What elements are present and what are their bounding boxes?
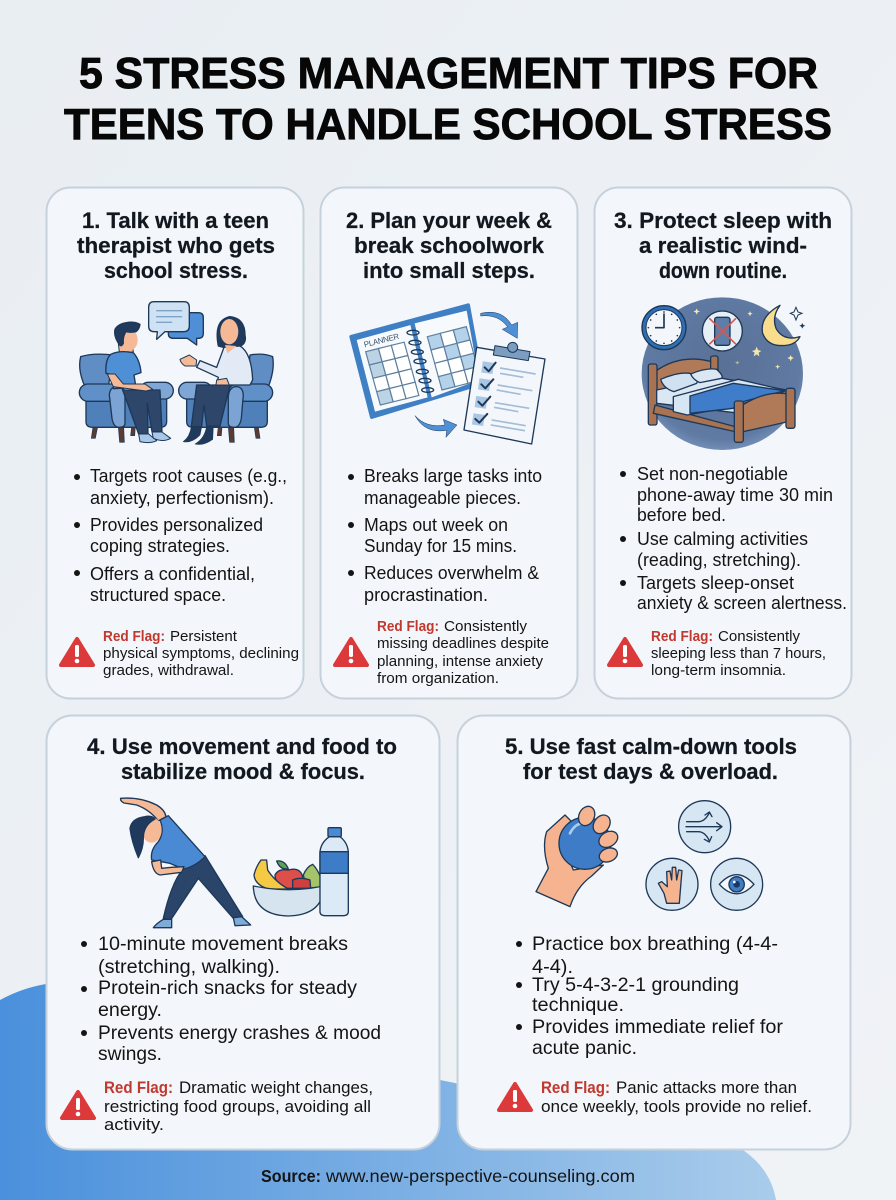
heading: tip 4: stabilize mood & focus. — [121, 759, 365, 784]
red flag: tip 5: once weekly, tools provide no relief. — [541, 1097, 812, 1116]
bullet list: tip 2: Reduces overwhelm & — [364, 563, 539, 583]
panel: tip 4 movement and food — [46, 716, 440, 1150]
bullet list: tip 3 — [620, 464, 847, 613]
heading: tip 3: down routine. — [659, 258, 787, 283]
heading: tip 5 — [505, 734, 797, 784]
bullet list: tip 2 — [348, 466, 542, 605]
icon: pear — [303, 864, 323, 888]
bullet list: tip 3: before bed. — [637, 505, 726, 525]
red flag: tip 4: activity. — [104, 1115, 164, 1134]
bullet list: tip 5: Provides immediate relief for — [532, 1016, 784, 1038]
icon: planner and checklist: PLANNER — [363, 332, 400, 349]
heading: tip 5: for test days & overload. — [523, 759, 778, 784]
bullet list: tip 4: Protein-rich snacks for steady — [98, 977, 357, 999]
red flag: tip 3 — [651, 628, 826, 679]
panel: tip 3 sleep — [594, 188, 852, 698]
panel: tip 1 therapist — [46, 188, 304, 698]
red flag: tip 2: from organization. — [377, 670, 499, 687]
heading: tip 2: break schoolwork — [354, 233, 545, 258]
bullet list: tip 3: Targets sleep-onset — [637, 573, 794, 593]
red flag: tip 3: long-term insomnia. — [651, 662, 786, 679]
title: TEENS TO HANDLE SCHOOL STRESS — [64, 100, 832, 149]
red flag: tip 2: Red Flag: — [377, 618, 439, 635]
icon: grounding hand — [646, 858, 698, 910]
red flag: tip 5: Panic attacks more than — [616, 1078, 797, 1097]
red flag: tip 2 — [377, 618, 549, 687]
source line: www.new-perspective-counseling.com — [325, 1166, 635, 1186]
bullet list: tip 4: energy. — [98, 999, 162, 1021]
bullet list: tip 1: structured space. — [90, 585, 226, 605]
red flag: tip 3: Consistently — [718, 628, 801, 645]
heading: tip 1: school stress. — [104, 258, 248, 283]
icon: warning triangle — [609, 639, 641, 665]
heading: tip 3: a realistic wind- — [639, 233, 807, 258]
panel: tip 5 calm-down tools — [458, 716, 850, 1150]
title — [64, 49, 832, 149]
bullet list: tip 5: Try 5-4-3-2-1 grounding — [532, 974, 739, 996]
red flag: tip 3: sleeping less than 7 hours, — [651, 645, 826, 662]
bullet list: tip 1: anxiety, perfectionism). — [90, 488, 274, 508]
bullet list: tip 5: technique. — [532, 994, 624, 1016]
bullet list: tip 5: Practice box breathing (4-4- — [532, 933, 778, 955]
bullet list: tip 2: procrastination. — [364, 585, 488, 605]
red flag: tip 5: Red Flag: — [541, 1078, 610, 1097]
icon: moon — [762, 305, 800, 346]
icon: stretching person with fruit bowl and water bottle — [121, 798, 348, 928]
background blue blob — [0, 984, 776, 1200]
icon: phone crossed out — [702, 311, 742, 351]
bullet list: tip 5: acute panic. — [532, 1037, 637, 1059]
heading: tip 4: 4. Use movement and food to — [87, 734, 397, 759]
red flag: tip 4: Red Flag: — [104, 1078, 173, 1097]
bullet list: tip 3: Set non-negotiable — [637, 464, 788, 484]
red flag: tip 3: Red Flag: — [651, 628, 713, 645]
bullet list: tip 1: coping strategies. — [90, 536, 230, 556]
bullet list: tip 1: Targets root causes (e.g., — [90, 466, 287, 486]
red flag: tip 1: Red Flag: — [103, 628, 165, 645]
bullet list: tip 2: manageable pieces. — [364, 488, 521, 508]
arrow: bottom — [415, 416, 457, 437]
red flag: tip 4 — [104, 1078, 373, 1134]
bullet list: tip 3: Use calming activities — [637, 529, 808, 549]
bullet list: tip 4: 10-minute movement breaks — [98, 933, 348, 955]
heading: tip 4 — [87, 734, 397, 784]
red flag: tip 1: grades, withdrawal. — [103, 662, 234, 679]
icon: hand squeezing stress ball — [536, 801, 763, 910]
bullet list: tip 1 — [74, 466, 287, 605]
icon: warning triangle — [61, 639, 93, 665]
bullet list: tip 2: Sunday for 15 mins. — [364, 536, 517, 556]
heading: tip 1: therapist who gets — [77, 233, 275, 258]
icon: bowl — [253, 886, 324, 916]
heading: tip 2: 2. Plan your week & — [346, 208, 552, 233]
icon: water bottle — [320, 828, 348, 916]
icon: teen and therapist in armchairs — [79, 302, 273, 444]
bullet list: tip 3: phone-away time 30 min — [637, 485, 833, 505]
red flag: tip 2: missing deadlines despite — [377, 635, 549, 652]
icon: banana — [254, 860, 288, 889]
bullet list: tip 5: 4-4). — [532, 956, 573, 978]
icon: eye — [711, 858, 763, 910]
bullet list: tip 3: (reading, stretching). — [637, 550, 801, 570]
title: 5 STRESS MANAGEMENT TIPS FOR — [79, 49, 818, 98]
icon: planner and checklist — [351, 305, 545, 444]
bullet list: tip 3: anxiety & screen alertness. — [637, 593, 847, 613]
heading: tip 3: 3. Protect sleep with — [614, 208, 832, 233]
bullet list: tip 5 — [516, 933, 784, 1059]
icon: warning triangle — [62, 1092, 94, 1118]
heading: tip 2: into small steps. — [363, 258, 535, 283]
heading: tip 1 — [77, 208, 275, 283]
icon: apple — [275, 869, 303, 888]
heading: tip 1: 1. Talk with a teen — [82, 208, 269, 233]
bullet list: tip 4: (stretching, walking). — [98, 956, 280, 978]
bullet list: tip 4: swings. — [98, 1043, 162, 1065]
bullet list: tip 1: Provides personalized — [90, 515, 263, 535]
icon: warning triangle — [499, 1084, 531, 1110]
heading: tip 2 — [346, 208, 552, 283]
icon: warning triangle — [335, 639, 367, 665]
red flag: tip 4: Dramatic weight changes, — [179, 1078, 373, 1097]
bullet list: tip 4: Prevents energy crashes & mood — [98, 1022, 381, 1044]
red flag: tip 5 — [541, 1078, 812, 1116]
source line: Source: — [261, 1166, 321, 1186]
red flag: tip 1: physical symptoms, declining — [103, 645, 299, 662]
bullet list: tip 2: Breaks large tasks into — [364, 466, 542, 486]
icon: breathing arrows — [679, 801, 731, 853]
icon: clock — [642, 306, 686, 350]
red flag: tip 4: restricting food groups, avoiding all — [104, 1097, 371, 1116]
heading: tip 3 — [614, 208, 832, 283]
red flag: tip 1 — [103, 628, 299, 679]
arrow: top — [481, 312, 518, 338]
bullet list: tip 1: Offers a confidential, — [90, 564, 255, 584]
red flag: tip 1: Persistent — [170, 628, 238, 645]
icon: bed at night with clock, phone and moon — [642, 297, 805, 450]
heading: tip 5: 5. Use fast calm-down tools — [505, 734, 797, 759]
red flag: tip 2: Consistently — [444, 618, 528, 635]
bullet list: tip 4 — [81, 933, 381, 1065]
red flag: tip 2: planning, intense anxiety — [377, 653, 543, 670]
icon: speech bubbles — [149, 302, 203, 345]
panel: tip 2 planner — [320, 188, 578, 698]
bullet list: tip 2: Maps out week on — [364, 515, 508, 535]
